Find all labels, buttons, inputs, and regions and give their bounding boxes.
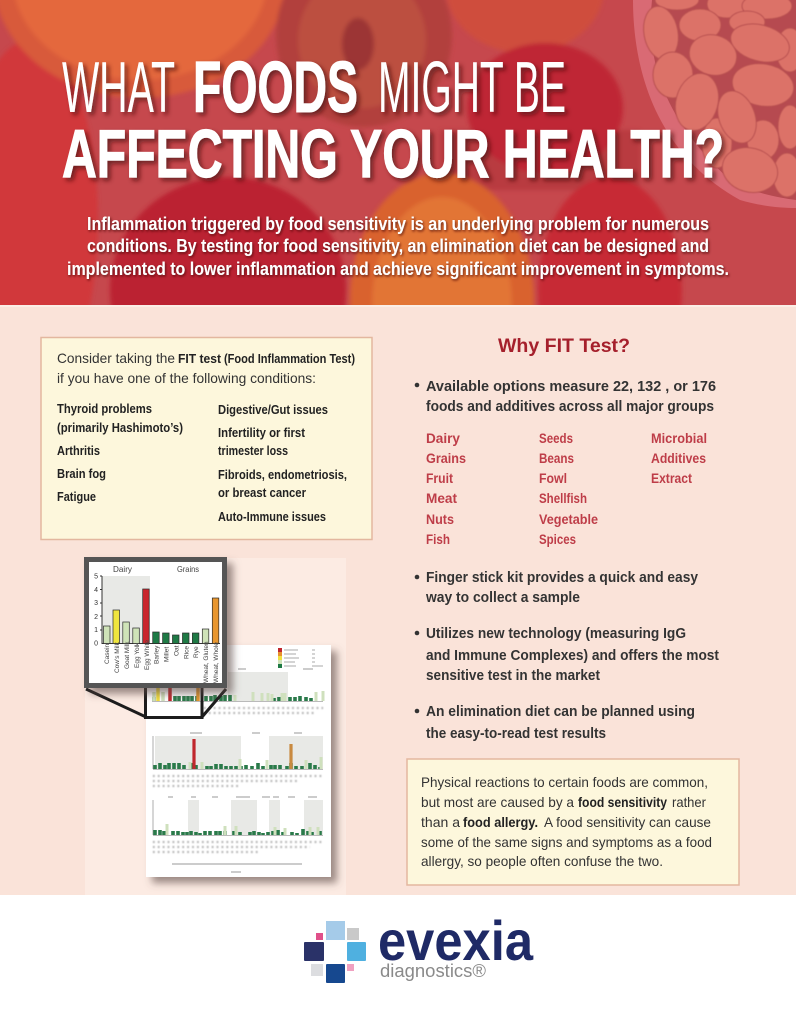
logo tagline: diagnostics® <box>380 961 486 981</box>
bullet: available options <box>415 379 716 415</box>
intro paragraph <box>67 214 729 279</box>
chart axis: 1 <box>94 627 98 634</box>
chart labels: Rice <box>184 646 190 659</box>
food group lists: Nuts <box>426 512 454 527</box>
callout text <box>421 774 712 869</box>
callout: sensitivity vs allergy <box>407 759 739 885</box>
bullet: new technology: Utilizes new technology (measuring IgG <box>426 626 686 642</box>
conditions list: Fatigue <box>57 490 96 504</box>
chart labels: Goat Milk <box>124 641 131 669</box>
callout text: allergy, so people often confuse the two. <box>421 853 663 869</box>
food group lists: Fowl <box>539 471 567 486</box>
chart labels: Barley <box>154 645 160 664</box>
conditions intro text: if you have one of the following conditions: <box>57 370 316 386</box>
bullet: available options: Available options measure 22, 132 , or 176 <box>426 379 716 395</box>
food group lists: Grains <box>426 451 466 466</box>
conditions list: Infertility or first <box>218 426 306 440</box>
food group lists <box>426 431 707 547</box>
food group lists: Fish <box>426 532 450 547</box>
bullet: available options: foods and additives across all major groups <box>426 399 714 415</box>
conditions list: trimester loss <box>218 444 288 458</box>
conditions list: Fibroids, endometriosis, <box>218 468 347 482</box>
conditions intro text: FIT test <box>178 351 222 366</box>
food group lists: Microbial <box>651 431 707 446</box>
bullet: finger stick kit: way to collect a sample <box>425 590 580 606</box>
callout text: rather <box>672 794 706 810</box>
conditions list: Digestive/Gut issues <box>218 403 328 417</box>
chart labels: Wheat, Gluten <box>203 641 210 683</box>
panel: conditions <box>41 338 372 540</box>
report group labels <box>168 669 317 872</box>
bullet: new technology: and Immune Complexes) and offers the most <box>426 648 719 664</box>
callout text: A food sensitivity can cause <box>544 814 711 830</box>
food group lists: Extract <box>651 471 692 486</box>
conditions list: Brain fog <box>57 467 106 481</box>
chart labels: Wheat, Whole <box>213 642 220 683</box>
chart labels: Millet <box>164 647 170 662</box>
chart axis: 5 <box>94 574 98 580</box>
sample report page <box>86 645 331 877</box>
food group lists: Additives <box>651 451 706 466</box>
footer background <box>0 895 796 1024</box>
heading: why FIT test: Why FIT Test? <box>498 336 630 357</box>
bullet: finger stick kit: Finger stick kit provides a quick and easy <box>426 570 698 586</box>
inset chart: dairy and grains <box>86 560 224 686</box>
chart labels: Cow's Milk <box>114 641 121 673</box>
chart labels: Casein <box>104 643 111 664</box>
chart headings <box>113 564 199 574</box>
callout text: food sensitivity <box>578 794 667 810</box>
chart axis: 0 <box>94 640 98 648</box>
bowl <box>633 0 796 208</box>
conditions intro text: (Food Inflammation Test) <box>224 351 355 366</box>
panel: sample report backdrop <box>85 558 346 895</box>
title: WHAT <box>62 48 175 128</box>
report highlighted bars <box>194 739 291 769</box>
window bars <box>154 688 198 701</box>
nuts in bowl <box>640 0 796 198</box>
bullet: elimination diet: the easy-to-read test results <box>426 726 606 742</box>
header photo background: fruits and nuts <box>0 0 796 305</box>
conditions intro text: Consider taking the <box>57 350 175 366</box>
conditions list: (primarily Hashimoto’s) <box>57 421 183 435</box>
food group lists: Seeds <box>539 431 573 446</box>
chart labels: Egg Yolk <box>134 642 141 668</box>
bullet: elimination diet <box>415 704 695 742</box>
intro paragraph: Inflammation triggered by food sensitivity is an underlying problem for numerous <box>87 214 709 234</box>
chart headings: Dairy <box>113 564 133 574</box>
chart band <box>102 576 150 643</box>
bullet: elimination diet: An elimination diet can be planned using <box>426 704 695 720</box>
logo mark <box>304 921 366 983</box>
bullet: new technology <box>415 626 719 684</box>
conditions list: Thyroid problems <box>57 402 152 416</box>
chart labels: Oat <box>174 645 180 656</box>
title: FOODS <box>193 48 358 128</box>
report dark green bars <box>154 695 320 835</box>
conditions intro text <box>57 350 355 386</box>
callout text: Physical reactions to certain foods are common, <box>421 774 708 790</box>
chart axis: 4 <box>94 587 98 594</box>
chart axis: 3 <box>94 600 98 607</box>
conditions list: Arthritis <box>57 444 100 458</box>
callout text: than a <box>421 814 460 830</box>
callout text: some of the same signs and symptoms as a food <box>421 834 712 850</box>
callout text: food allergy. <box>463 814 538 830</box>
report axis lines <box>152 702 323 836</box>
intro paragraph: conditions. By testing for food sensitivity, an elimination diet can be designed and <box>87 236 709 256</box>
food group lists: Spices <box>539 532 576 547</box>
conditions list <box>57 402 347 524</box>
bullet: finger stick kit <box>415 570 698 606</box>
food group lists: Shellfish <box>539 491 587 506</box>
report food labels <box>153 708 323 852</box>
callout text: but most are caused by a <box>421 794 574 810</box>
conditions list: Auto-Immune issues <box>218 510 326 524</box>
report legend <box>278 648 323 668</box>
chart bars <box>104 589 219 644</box>
intro paragraph: implemented to lower inflammation and achieve significant improvement in symptoms. <box>67 259 729 279</box>
food group lists: Dairy <box>426 431 460 446</box>
chart axis: 2 <box>94 614 98 621</box>
logo: evexia diagnostics <box>304 909 534 983</box>
food group lists: Vegetable <box>539 512 598 527</box>
chart axis <box>94 574 98 648</box>
food group lists: Fruit <box>426 471 453 486</box>
chart labels: Egg White <box>144 640 151 670</box>
title <box>62 48 724 192</box>
logo wordmark: evexia <box>378 909 534 972</box>
magnifier frame <box>86 688 226 718</box>
bullet: new technology: sensitive test in the market <box>426 668 600 684</box>
food group lists: Beans <box>539 451 574 466</box>
food group lists: Meat <box>426 491 457 506</box>
chart headings: Grains <box>177 564 199 574</box>
chart labels: Rye <box>193 646 200 658</box>
conditions list: or breast cancer <box>218 486 306 500</box>
header bottom edge <box>0 305 796 307</box>
report light bars <box>167 691 323 835</box>
chart labels <box>104 640 220 683</box>
title: MIGHT BE <box>378 48 566 128</box>
